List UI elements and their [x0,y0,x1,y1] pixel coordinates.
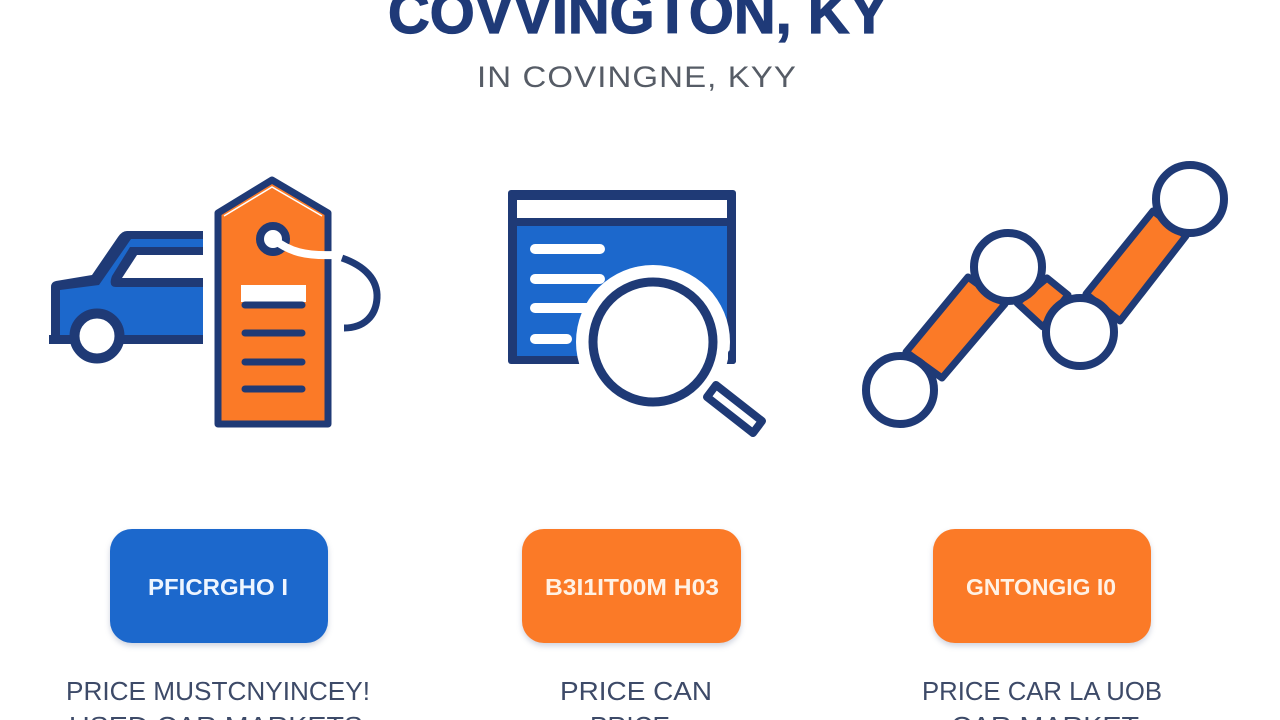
string loop [342,258,377,328]
tag white label [241,285,306,302]
caption: middle column: PRICE CAN [560,676,712,706]
browser content area [517,226,727,356]
button: orange right: GNTONGIG I0 [966,574,1116,600]
price tag [218,180,328,424]
caption: middle column [560,676,712,720]
magnifier lens [593,282,713,402]
button: orange middle [522,529,741,643]
icon: line chart with nodes [866,165,1224,424]
caption: right column: PRICE CAR LA UOB [922,676,1162,706]
chart bands [906,211,1186,378]
chart nodes [866,165,1224,424]
icon: browser with magnifying glass [508,190,762,433]
caption: right column [922,676,1162,720]
button: orange right [933,529,1151,643]
browser header bar [517,200,727,218]
caption: left column [66,676,370,720]
button: blue [110,529,328,643]
tag text lines [245,305,302,389]
browser text lines [530,244,605,344]
tag string [273,239,334,255]
button: orange middle: B3I1IT00M H03 [545,574,719,600]
tag edge highlight [224,187,322,216]
caption: left column: PRICE MUSTCNYINCEY! [66,676,370,706]
car wheel [74,314,120,358]
magnifier halo [576,265,730,419]
browser window [508,190,736,364]
browser right edge [728,350,736,364]
button: blue: PFICRGHO I [148,574,288,600]
subtitle: IN COVINGNE, KYY [477,61,797,94]
icon: car with price tag [49,180,377,424]
tag hole [260,226,286,252]
car body [49,231,203,344]
magnifier handle [707,385,762,433]
